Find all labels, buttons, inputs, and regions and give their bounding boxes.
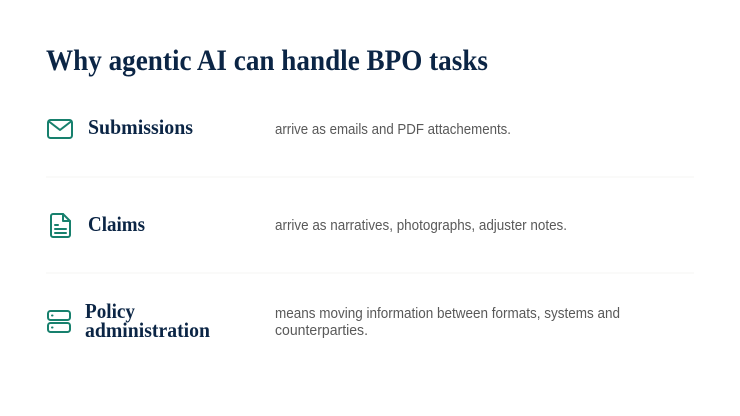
text: policy description xyxy=(275,306,620,339)
row: submissions xyxy=(48,115,511,139)
heading: claims: Claims xyxy=(88,212,145,236)
icon: document xyxy=(51,214,70,237)
heading: policy administration: administration xyxy=(85,318,210,342)
text: policy description: means moving information between formats, systems and xyxy=(275,306,620,322)
heading: submissions: Submissions xyxy=(88,115,193,139)
title: Why agentic AI can handle BPO tasks xyxy=(46,44,488,77)
heading: policy administration: Policy xyxy=(85,299,135,323)
row: policy administration xyxy=(48,299,620,342)
text: claims description: arrive as narratives, photographs, adjuster notes. xyxy=(275,218,567,234)
row: claims xyxy=(51,212,567,237)
heading: policy administration xyxy=(85,299,210,342)
text: submissions description: arrive as emails and PDF attachements. xyxy=(275,122,511,138)
icon: envelope xyxy=(48,120,72,138)
icon: server xyxy=(48,311,70,332)
text: policy description: counterparties. xyxy=(275,323,368,339)
